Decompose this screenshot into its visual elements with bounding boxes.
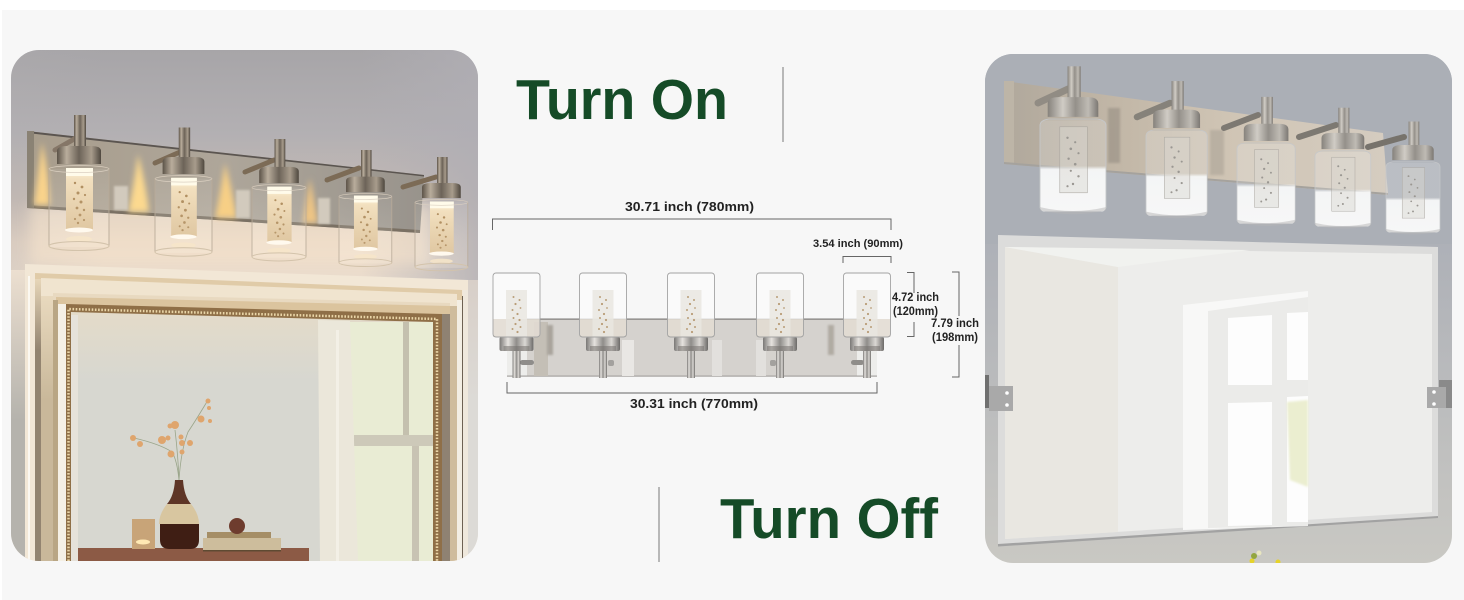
dimension: total height: 7.79 inch — [931, 318, 979, 330]
curtain — [318, 320, 358, 561]
title: Turn Off: Turn Off — [720, 487, 939, 551]
books and ball — [203, 518, 281, 552]
front lamp 2 — [580, 273, 626, 378]
beaded inner edge — [68, 309, 437, 561]
dimension: overall width — [492, 199, 891, 230]
dimension: total height: (198mm) — [932, 332, 978, 344]
front lamp 4 — [756, 273, 804, 378]
title: Turn On: Turn On — [516, 68, 728, 132]
dimension: shade width: 3.54 inch (90mm) — [813, 238, 903, 250]
dimension: shade height: 4.72 inch — [892, 292, 939, 304]
right mirror clip — [1427, 380, 1452, 408]
panel: lit vanity light photo — [11, 50, 478, 562]
table — [78, 548, 309, 562]
backplate front view — [507, 318, 877, 377]
backplate — [1004, 81, 1388, 195]
dimension: mounting width: 30.31 inch (770mm) — [630, 396, 758, 411]
dimension: total height — [931, 272, 979, 377]
window reflection — [1183, 291, 1308, 530]
dimension: shade height — [892, 272, 939, 336]
dimension: mounting width — [507, 382, 877, 411]
warm glow on wall — [30, 205, 430, 265]
dimension: shade height: (120mm) — [893, 306, 938, 318]
product dimension diagram — [492, 199, 979, 411]
front lamp 3 — [668, 273, 714, 378]
unlit lamp 1 — [1038, 66, 1106, 214]
divider bottom — [658, 487, 660, 562]
right moulding strips — [442, 296, 463, 561]
front lamp 5 — [844, 273, 890, 378]
gold mirror frame — [25, 264, 468, 561]
left mirror clip — [985, 375, 1013, 411]
mirror reflection — [71, 312, 434, 561]
left moulding strips — [28, 276, 66, 561]
window — [350, 322, 434, 561]
vase with flowers — [130, 398, 212, 549]
unlit lamp 5 — [1368, 122, 1440, 234]
divider top — [782, 67, 784, 142]
panel: unlit vanity light photo — [985, 54, 1452, 564]
unlit lamp 3 — [1224, 97, 1295, 226]
unlit lamp 2 — [1137, 81, 1207, 218]
wall — [11, 50, 478, 561]
dimension: overall width: 30.71 inch (780mm) — [625, 199, 754, 214]
candle — [132, 519, 155, 549]
front lamp 1 — [493, 273, 540, 378]
lit lamp 5 — [403, 157, 468, 271]
lit lamp 4 — [327, 150, 392, 267]
dimension: shade width — [813, 238, 903, 263]
unlit lamp 4 — [1299, 108, 1371, 229]
flowers below mirror — [1250, 550, 1280, 563]
mirror — [998, 235, 1438, 546]
lit lamp 2 — [155, 128, 212, 256]
lit lamp 3 — [245, 139, 306, 261]
lit lamp 1 — [49, 115, 109, 250]
backplate — [27, 131, 424, 233]
wall — [985, 54, 1452, 563]
